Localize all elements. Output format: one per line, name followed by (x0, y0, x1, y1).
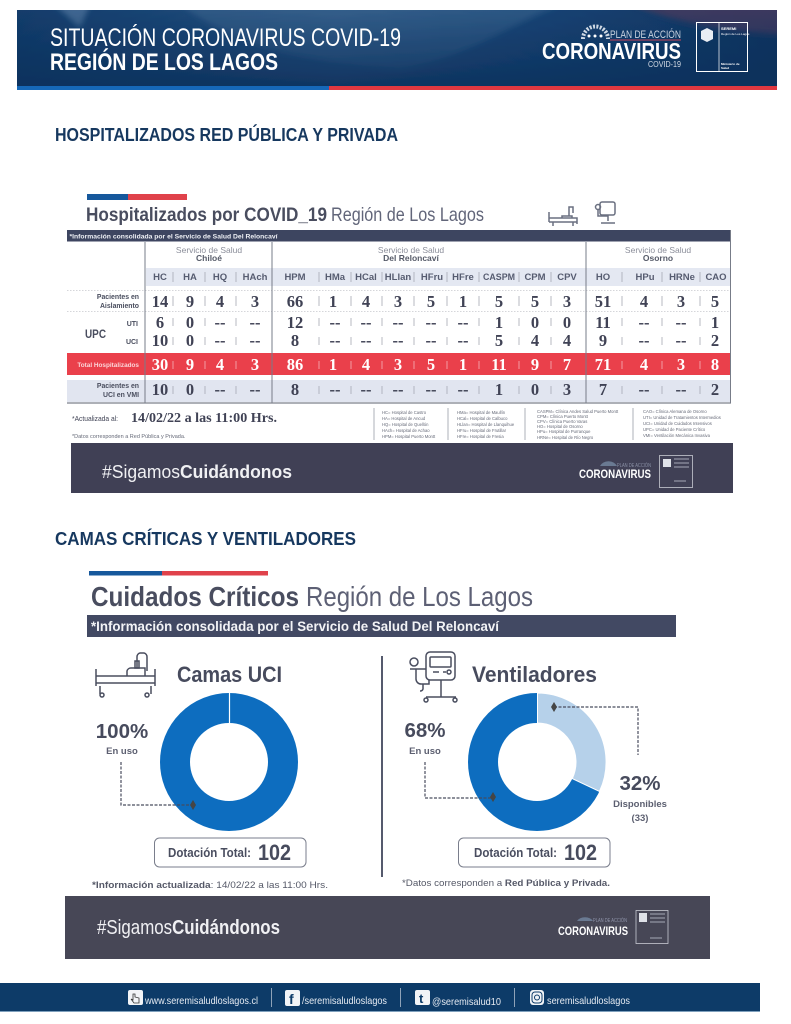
row: uci: -- (360, 331, 372, 350)
legend: hospital abbreviations: HCal= Hospital de Calbuco (457, 416, 508, 421)
row: uti: -- (392, 313, 404, 332)
row: uci: -- (214, 331, 226, 350)
column header band (146, 268, 731, 286)
legend: hospital abbreviations: HFru= Hospital de Frutillar (457, 428, 507, 433)
callout: camas en uso (96, 720, 196, 810)
row: uci en vmi: -- (458, 380, 468, 399)
service headers: Servicio de Salud (378, 245, 444, 255)
callout: camas en uso: En uso (106, 746, 138, 757)
row: aislamiento: 5 (427, 292, 435, 311)
row: uci en vmi: 10 (152, 380, 168, 399)
legend: hospital abbreviations: HPu= Hospital de Purranque (537, 429, 591, 434)
banner: sigamos cuidándonos 1 (71, 443, 733, 493)
row: uci en vmi: -- (676, 380, 686, 399)
column header band: HPM (284, 272, 306, 283)
column header band: HCal (355, 272, 377, 283)
banner: sigamos cuidándonos 2 (65, 896, 710, 959)
logo: plan de acción coronavirus (542, 26, 681, 69)
logo small (558, 910, 668, 944)
column header band: HLlan (385, 272, 411, 283)
update note: *Actualizada al: (72, 414, 118, 423)
row: uti: 11 (595, 313, 611, 332)
banner: sigamos cuidándonos 1: #SigamosCuidándonos (102, 462, 292, 482)
logo: seremi seal: Ministerio de (721, 62, 740, 66)
legend: hospital abbreviations: UTI= Unidad de Tratamientos Intermedios (643, 415, 721, 420)
column header band: HFre (452, 272, 474, 283)
legend: hospital abbreviations: HMa= Hospital de Maullín (457, 410, 506, 415)
panel title: Cuidados Críticos (91, 581, 299, 612)
service headers (176, 245, 691, 263)
row labels: UCI (126, 339, 138, 346)
row: aislamiento (152, 292, 719, 311)
vmi band (67, 380, 731, 402)
column header band: HA (183, 272, 197, 283)
row: uti: 1 (495, 313, 503, 332)
table grid (145, 230, 730, 403)
row: total hospitalizados: 9 (531, 355, 539, 374)
callout: ventiladores en uso (404, 719, 496, 802)
logo: seremi seal: Región de Los Lagos (721, 32, 750, 36)
total box: camas: Dotación Total: (168, 846, 251, 860)
row: uci: 4 (563, 331, 571, 350)
row: uci en vmi: -- (426, 380, 436, 399)
update note: *Datos corresponden a Red Pública y Privada. (72, 434, 186, 440)
total hospitalizados band (67, 353, 731, 375)
callout: disponibles (551, 702, 667, 824)
legend: hospital abbreviations: HPM= Hospital Puerto Montt (382, 434, 436, 439)
row: uci: -- (676, 331, 686, 350)
row: total hospitalizados: 3 (394, 355, 402, 374)
legend: hospital abbreviations: HAch= Hospital de Achao (382, 428, 430, 433)
logo: plan de acción coronavirus: COVID-19 (648, 60, 681, 69)
update note: 14/02/22 a las 11:00 Hrs. (131, 410, 277, 425)
legend: hospital abbreviations: HO= Hospital de Osorno (537, 424, 583, 429)
row: uci: -- (330, 331, 340, 350)
row: uti: 0 (186, 313, 194, 332)
row: aislamiento: 4 (362, 292, 370, 311)
row: uti: 0 (531, 313, 539, 332)
banner: sigamos cuidándonos 2: #SigamosCuidándonos (97, 917, 280, 939)
row: total hospitalizados: 4 (640, 355, 648, 374)
legend: hospital abbreviations: HRNe= Hospital de Río Negro (537, 435, 594, 440)
logo small: CORONAVIRUS (558, 924, 628, 938)
footnote: datos: *Datos corresponden a Red Pública y Privada. (402, 878, 610, 889)
donut: camas uci (175, 693, 283, 816)
row: uci en vmi: -- (330, 380, 340, 399)
row: uci: -- (250, 331, 260, 350)
callout: disponibles: Disponibles (613, 799, 667, 810)
row labels: UPC (85, 329, 106, 341)
row: total hospitalizados: 7 (563, 355, 571, 374)
row: aislamiento: 51 (595, 292, 611, 311)
footer: facebook (285, 990, 387, 1007)
row: total hospitalizados: 71 (595, 355, 611, 374)
total box: ventiladores: 102 (564, 840, 597, 865)
footer: twitter: t (419, 991, 424, 1006)
column header band: HPu (636, 272, 655, 283)
row: uci en vmi: 0 (531, 380, 539, 399)
header title (50, 23, 401, 76)
icon: ventilator (410, 652, 457, 702)
row labels (77, 294, 139, 399)
row: total hospitalizados: 8 (711, 355, 719, 374)
row: uti (156, 313, 719, 332)
row: uci: 2 (711, 331, 719, 350)
table title: Hospitalizados por COVID_19 (86, 204, 327, 226)
legend: hospital abbreviations (374, 408, 721, 440)
column header band: HFru (421, 272, 443, 283)
row: uti: -- (676, 313, 686, 332)
row: uci: -- (392, 331, 404, 350)
footer: website: www.seremisaludloslagos.cl (144, 995, 258, 1007)
heading: hospitalizados: HOSPITALIZADOS RED PÚBLICA Y PRIVADA (55, 124, 398, 145)
row: uti: -- (214, 313, 226, 332)
icon: bed small (549, 207, 577, 226)
footer: facebook: f (289, 991, 294, 1007)
row: uci en vmi: -- (392, 380, 404, 399)
legend: hospital abbreviations: UPC= Unidad de Paciente Crítico (643, 427, 706, 432)
row: aislamiento: 1 (329, 292, 337, 311)
camas uci title: Camas UCI (177, 662, 282, 687)
column header band: CPV (557, 272, 577, 283)
callout: ventiladores en uso: 68% (404, 719, 446, 742)
row: uci: -- (638, 331, 650, 350)
callout: ventiladores en uso: En uso (409, 746, 441, 757)
row: uci en vmi: 2 (711, 380, 719, 399)
column header band: CASPM (483, 272, 515, 283)
row: total hospitalizados: 3 (251, 355, 259, 374)
column header band: HQ (213, 272, 227, 283)
legend: hospital abbreviations: CPM= Clínica Puerto Montt (537, 414, 589, 419)
row: uci en vmi: 8 (291, 380, 299, 399)
column header band: CPM (524, 272, 546, 283)
column header band: HAch (243, 272, 268, 283)
logo small (579, 456, 692, 488)
logo small: PLAN DE ACCIÓN (617, 462, 651, 469)
row: total hospitalizados: 4 (216, 355, 224, 374)
header banner (17, 5, 790, 90)
callout: disponibles: 32% (619, 772, 661, 795)
icon: ventilator small (596, 202, 615, 223)
row: aislamiento: 9 (186, 292, 194, 311)
total box: ventiladores (458, 838, 610, 867)
logo small: PLAN DE ACCIÓN (593, 917, 627, 924)
row: total hospitalizados: 9 (186, 355, 194, 374)
logo: seremi seal (696, 22, 750, 72)
info band (67, 230, 731, 242)
legend: hospital abbreviations: CPV= Clínica Puerto Varas (537, 419, 587, 424)
row labels: Aislamiento (100, 303, 139, 310)
logo: plan de acción coronavirus: CORONAVIRUS (542, 38, 681, 64)
row: total hospitalizados: 11 (491, 355, 507, 374)
row labels: UTI (127, 321, 138, 328)
row: aislamiento: 3 (251, 292, 259, 311)
header title: REGIÓN DE LOS LAGOS (50, 48, 278, 76)
row: uti: -- (426, 313, 436, 332)
divider (381, 656, 383, 877)
row: aislamiento: 4 (640, 292, 648, 311)
column header band: HMa (325, 272, 346, 283)
column header band: HRNe (669, 272, 695, 283)
row: uci en vmi: -- (638, 380, 650, 399)
update note (72, 410, 277, 440)
row: total hospitalizados: 1 (459, 355, 467, 374)
footer: twitter (415, 990, 501, 1008)
row: aislamiento: 14 (152, 292, 168, 311)
row: uti: 12 (287, 313, 303, 332)
row: aislamiento: 66 (287, 292, 303, 311)
row: uti: 6 (156, 313, 164, 332)
row: uci en vmi: 3 (563, 380, 571, 399)
footer: instagram (530, 990, 630, 1007)
row: uci: -- (426, 331, 436, 350)
header title: SITUACIÓN CORONAVIRUS COVID-19 (50, 23, 401, 52)
panel: hospitalizados table (67, 194, 733, 493)
row labels: Total Hospitalizados (77, 362, 139, 369)
column header band: HO (596, 272, 610, 283)
row: total hospitalizados: 86 (287, 355, 303, 374)
row guides (67, 290, 731, 312)
row labels: UCI en VMI (103, 392, 139, 399)
legend: hospital abbreviations: VMI= Ventilación Mecánica Invasiva (643, 433, 711, 438)
column header band: HC (153, 272, 167, 283)
row: aislamiento: 5 (711, 292, 719, 311)
info band: *Información consolidada por el Servicio de Salud Del Reloncaví (91, 619, 500, 634)
row: uti: -- (360, 313, 372, 332)
row: uci: 4 (531, 331, 539, 350)
row: uci en vmi: 7 (599, 380, 607, 399)
service headers: Servicio de Salud (176, 245, 242, 255)
service headers: Chiloé (196, 253, 222, 263)
icon: hospital bed (96, 653, 155, 697)
footer: instagram: seremisaludloslagos (547, 995, 630, 1007)
legend: hospital abbreviations: HA= Hospital de Ancud (382, 416, 426, 421)
service headers: Servicio de Salud (625, 245, 691, 255)
donut: ventiladores (483, 693, 606, 816)
row labels: Pacientes en (97, 294, 139, 301)
total box: camas (154, 838, 306, 867)
row: aislamiento: 3 (563, 292, 571, 311)
row: uci en vmi: -- (360, 380, 372, 399)
footer: twitter: @seremisalud10 (432, 996, 501, 1008)
row: uci en vmi: -- (250, 380, 260, 399)
table subtitle: Región de Los Lagos (331, 204, 484, 226)
total box: camas: 102 (258, 840, 291, 865)
legend: hospital abbreviations: HQ= Hospital de Quellón (382, 422, 429, 427)
row: uti: -- (330, 313, 340, 332)
row: total hospitalizados: 3 (677, 355, 685, 374)
row: uti: -- (250, 313, 260, 332)
row: uci: -- (458, 331, 468, 350)
row: total hospitalizados: 5 (427, 355, 435, 374)
row: uci: 0 (186, 331, 194, 350)
row: aislamiento: 3 (394, 292, 402, 311)
accent bar (89, 571, 268, 576)
legend: hospital abbreviations: HFre= Hospital de Fresia (457, 434, 504, 439)
logo: plan de acción coronavirus: PLAN DE ACCIÓN (610, 28, 681, 41)
accent bar (87, 194, 187, 200)
row: uci en vmi (152, 380, 719, 399)
row: total hospitalizados: 4 (362, 355, 370, 374)
row: total hospitalizados (152, 355, 719, 374)
info band: *Información consolidada por el Servicio de Salud Del Reloncaví (70, 234, 278, 240)
row: uci en vmi: 0 (186, 380, 194, 399)
legend: hospital abbreviations: CASPM= Clínica Andes Salud Puerto Montt (537, 409, 619, 414)
row: uci en vmi: -- (214, 380, 226, 399)
row: uci: 9 (599, 331, 607, 350)
logo: seremi seal: Salud (721, 66, 729, 70)
row: total hospitalizados: 1 (329, 355, 337, 374)
legend: hospital abbreviations: CAO= Clínica Alemana de Osorno (643, 409, 707, 414)
row: uti: 0 (563, 313, 571, 332)
column ticks (173, 272, 700, 394)
ventiladores title: Ventiladores (472, 662, 597, 687)
row: total hospitalizados: 30 (152, 355, 168, 374)
row labels: Pacientes en (97, 383, 139, 390)
legend: hospital abbreviations: HLlan= Hospital de Llanquihue (457, 422, 515, 427)
info band (87, 615, 676, 637)
panel subtitle: Región de Los Lagos (306, 581, 533, 612)
row: uci en vmi: 1 (495, 380, 503, 399)
row: aislamiento: 5 (495, 292, 503, 311)
row: aislamiento: 1 (459, 292, 467, 311)
row: aislamiento: 5 (531, 292, 539, 311)
row: uti: -- (638, 313, 650, 332)
callout: camas en uso: 100% (96, 720, 148, 743)
footer: website (128, 990, 258, 1007)
row: uci: 10 (152, 331, 168, 350)
row: uti: 1 (711, 313, 719, 332)
service headers: Del Reloncaví (383, 253, 440, 263)
footnote: fecha: *Información actualizada : 14/02/22 a las 11:00 Hrs. (92, 880, 328, 891)
footer bar (0, 983, 760, 1012)
callout: disponibles: (33) (632, 813, 648, 824)
row: uci: 5 (495, 331, 503, 350)
row: aislamiento: 3 (677, 292, 685, 311)
row: aislamiento: 4 (216, 292, 224, 311)
panel: cuidados críticos (65, 571, 710, 959)
service headers: Osorno (643, 253, 673, 263)
row: uti: -- (458, 313, 468, 332)
legend: hospital abbreviations: HC= Hospital de Castro (382, 410, 427, 415)
total box: ventiladores: Dotación Total: (474, 846, 557, 860)
legend: hospital abbreviations: UCI= Unidad de Cuidados Intensivos (643, 421, 712, 426)
column header band: CAO (705, 272, 727, 283)
logo: seremi seal: SEREMI (721, 26, 736, 31)
footer: facebook: /seremisaludloslagos (302, 995, 387, 1007)
logo small: CORONAVIRUS (579, 469, 651, 481)
row: uci: 8 (291, 331, 299, 350)
row: uci (152, 331, 719, 350)
heading: camas críticas: CAMAS CRÍTICAS Y VENTILADORES (55, 528, 356, 549)
